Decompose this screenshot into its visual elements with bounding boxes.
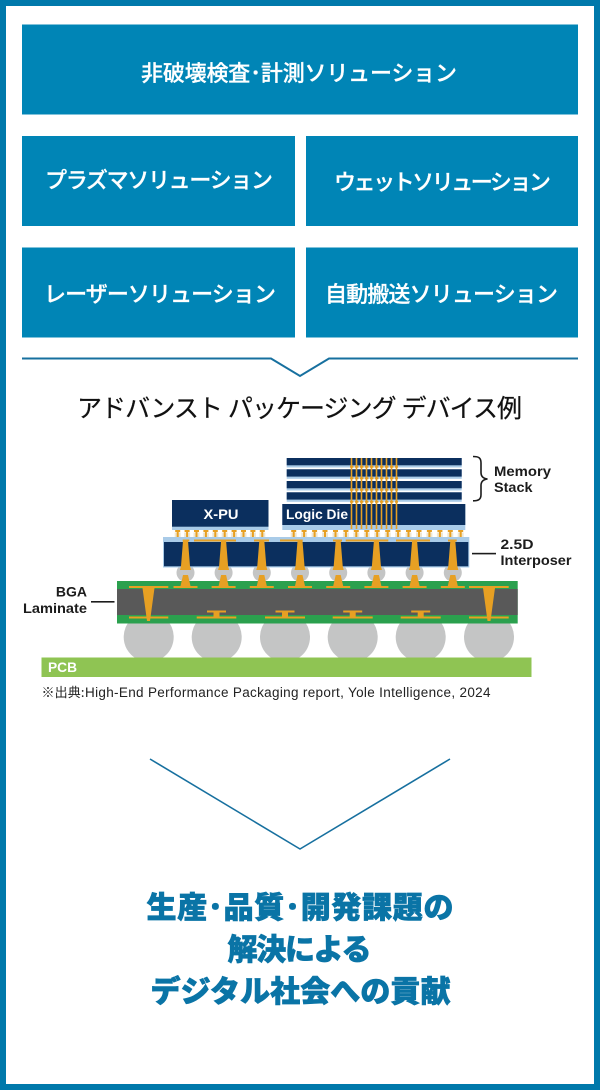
PCB layer [42, 658, 532, 677]
large solder balls [124, 612, 514, 662]
logic die: Logic Die [286, 506, 348, 522]
label: Memory Stack with brace: Memory [494, 463, 551, 479]
PCB layer: PCB [48, 660, 77, 675]
panel: plasma solutions [22, 136, 295, 226]
conclusion text: 生産･品質･開発課題の [146, 883, 454, 927]
panel: non-destructive inspection and metrology solutions [22, 24, 578, 114]
label: BGA Laminate [23, 584, 114, 616]
label: Memory Stack with brace [473, 456, 551, 501]
arrow: large chevron [150, 759, 450, 849]
conclusion text: デジタル社会への貢献 [150, 967, 450, 1011]
X-PU die [172, 500, 268, 537]
panel: laser solutions [22, 248, 295, 338]
conclusion text: 解決による [228, 925, 372, 969]
label: BGA Laminate: BGA [56, 584, 87, 600]
label: 2.5D Interposer: 2.5D [500, 536, 534, 552]
through-silicon vias [350, 458, 398, 529]
X-PU die: X-PU [204, 506, 238, 522]
panel: wet solutions [306, 136, 578, 226]
source note: High-End Performance Packaging report, Yole Intelligence, 2024 [85, 685, 491, 700]
source note: ※出典: [42, 682, 84, 701]
panel: plasma solutions: プラズマソリューション [45, 163, 273, 195]
label: Memory Stack with brace: Stack [494, 479, 533, 495]
arrow: bracket line pointing to diagram [22, 358, 578, 376]
BGA laminate layer [117, 581, 518, 624]
chart: advanced packaging cross-section [42, 458, 532, 677]
logic die [282, 504, 465, 537]
panel: automated transfer solutions: 自動搬送ソリューション [325, 277, 558, 309]
panel: automated transfer solutions [306, 248, 578, 338]
label: BGA Laminate: Laminate [23, 600, 87, 616]
conclusion text [146, 883, 454, 1011]
label: 2.5D Interposer: Interposer [500, 552, 572, 568]
2.5D interposer layer [163, 537, 469, 588]
small solder balls [176, 564, 462, 582]
heading: advanced packaging device example: アドバンスト パッケージング デバイス例 [77, 395, 522, 423]
panel: laser solutions: レーザーソリューション [44, 277, 276, 309]
panel: non-destructive inspection and metrology solutions: 非破壊検査･計測ソリューション [141, 56, 457, 88]
memory stack layers [287, 458, 462, 529]
label: 2.5D Interposer [472, 536, 572, 568]
panel: wet solutions: ウェットソリューション [334, 165, 551, 197]
